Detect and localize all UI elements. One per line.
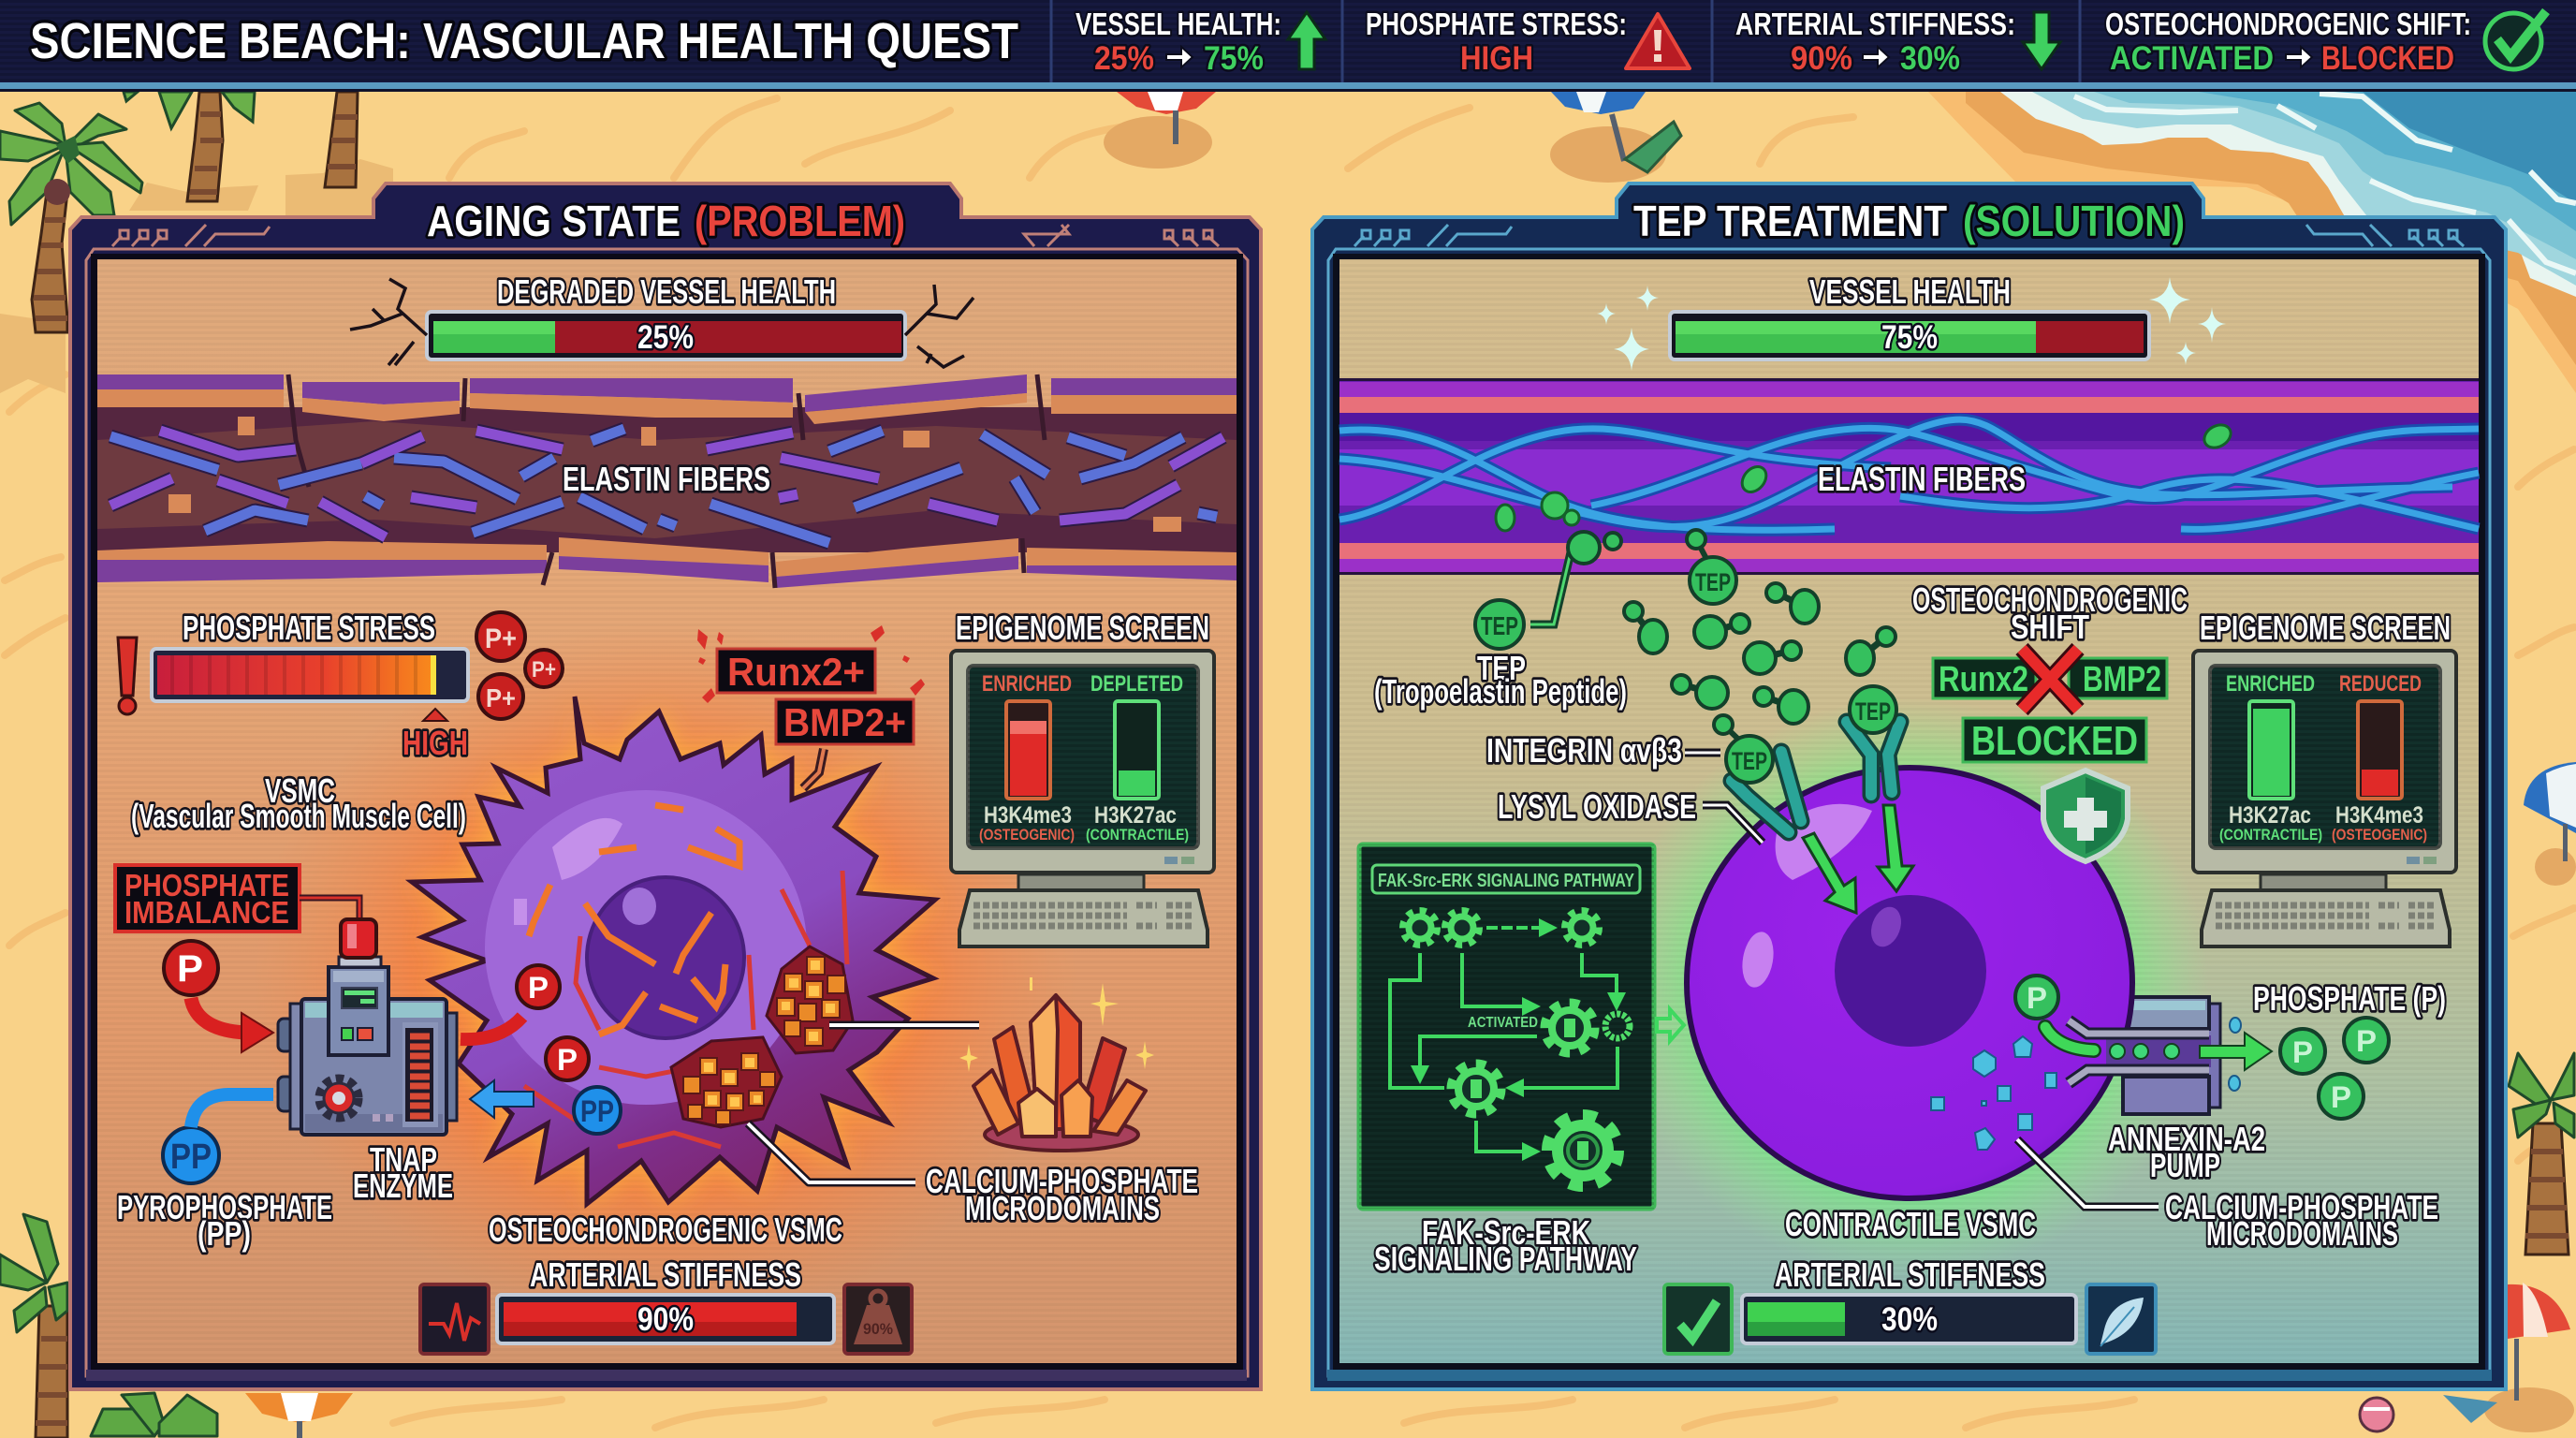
header bar	[0, 0, 2576, 92]
label: tep: (Tropoelastin Peptide)	[1374, 672, 1627, 711]
label: osteochondrogenic shift	[1912, 580, 2188, 646]
pump: annexin-a2	[2123, 997, 2220, 1114]
callout line: microdomains	[2017, 1139, 2159, 1207]
icon: cracks beside bar	[350, 279, 973, 367]
stat: arterial stiffness: ARTERIAL STIFFNESS:	[1735, 7, 2015, 41]
panel frame	[70, 183, 1261, 1389]
parasol: right blue	[2524, 762, 2576, 886]
panel heading: AGING STATE	[427, 197, 681, 245]
label: annexin-a2 pump: PUMP	[2150, 1146, 2220, 1184]
tags: runx2 bmp2 blocked: BMP2	[2083, 660, 2161, 699]
molecule: pyrophosphate: PP	[170, 1137, 212, 1177]
tube: h3k4me3	[2358, 701, 2402, 799]
label: tep	[1374, 649, 1627, 711]
label: contractile vsmc: CONTRACTILE VSMC	[1785, 1205, 2036, 1243]
label: elastin fibers: ELASTIN FIBERS	[563, 460, 770, 498]
gears	[1403, 911, 1630, 1186]
tags: runx2 bmp2 blocked: BLOCKED	[1971, 718, 2138, 764]
computer: epigenome screen: ENRICHED	[2226, 671, 2315, 697]
molecules: tropoelastin peptides	[1624, 583, 1895, 724]
palm: right	[2509, 1053, 2574, 1255]
label: lysyl oxidase: LYSYL OXIDASE	[1498, 787, 1696, 826]
tags: runx2 bmp2 blocked: Runx2	[1939, 660, 2028, 699]
tag: bmp2+: BMP2+	[783, 700, 906, 744]
sparks	[697, 625, 925, 703]
label callouts: calcium-phosphate lines	[748, 1025, 979, 1182]
molecule: tep free: TEP	[1695, 568, 1731, 596]
arrow and molecule: pp	[470, 1080, 621, 1134]
label: calcium-phosphate microdomains: MICRODOMAINS	[2206, 1214, 2398, 1253]
label: vsmc: VSMC	[265, 771, 335, 810]
label: arterial stiffness: ARTERIAL STIFFNESS	[1775, 1255, 2045, 1294]
panel heading	[1633, 197, 2185, 245]
stat: arterial stiffness	[1735, 7, 2060, 77]
phosphate particles	[476, 612, 563, 719]
pathway arrows	[1390, 928, 1617, 1152]
parasols, palms: bottom and right edge	[0, 762, 2576, 1438]
computer: epigenome screen	[2193, 651, 2456, 946]
panel: fak-src-erk pathway	[1359, 844, 1654, 1209]
tube: h3k27ac	[2249, 701, 2293, 799]
molecules: phosphate p: P	[2331, 1080, 2351, 1114]
phosphate particles: P+	[532, 657, 556, 682]
stat: vessel health: 75%	[1204, 40, 1264, 77]
stat: arterial stiffness: 30%	[1900, 40, 1960, 77]
label: calcium-phosphate microdomains: MICRODOMAINS	[965, 1189, 1160, 1227]
pathway title	[1372, 865, 1640, 893]
receptors: integrin with bound tep: TEP	[1732, 747, 1767, 775]
arrow: phosphate out: P	[528, 971, 549, 1005]
label: lysyl oxidase	[1498, 787, 1763, 843]
artery: damaged vessel wall	[97, 374, 1237, 588]
arrows: signal into nucleus	[1803, 805, 1913, 913]
label: arterial stiffness: ARTERIAL STIFFNESS	[530, 1255, 801, 1294]
nucleus	[587, 877, 744, 1038]
label: tep: TEP	[1477, 649, 1526, 687]
label: vessel health: VESSEL HEALTH	[1809, 272, 2011, 311]
molecule: tep with callout	[1475, 532, 1621, 649]
crystal: calcium-phosphate	[973, 995, 1146, 1151]
tube: h3k4me3	[1006, 701, 1050, 799]
artery: healthy vessel wall	[1339, 378, 2479, 575]
parasol: bottom	[245, 1393, 353, 1438]
palm 1	[0, 103, 142, 332]
nucleus	[1835, 895, 1986, 1047]
palm: bottom left	[0, 1214, 67, 1438]
bar: arterial stiffness 90%	[497, 1295, 834, 1343]
receptors: integrin with bound tep	[1714, 686, 1900, 832]
ocean: top right shoreline	[1928, 92, 2576, 393]
computer: epigenome screen: H3K27ac	[1094, 802, 1177, 829]
phosphate particles: P+	[486, 683, 516, 712]
label: fak-src-erk: FAK-Src-ERK	[1422, 1213, 1590, 1252]
panel heading: (SOLUTION)	[1963, 197, 2185, 245]
icon: heartbeat	[420, 1284, 489, 1354]
microdomain clusters	[671, 946, 853, 1127]
molecules: phosphate p: P	[2027, 981, 2047, 1015]
tube: h3k27ac	[1115, 701, 1159, 799]
arrow and molecule: pp: PP	[580, 1094, 614, 1128]
tag: runx2+: Runx2+	[727, 650, 865, 694]
icon: shield	[2043, 770, 2128, 861]
label: pyrophosphate: PYROPHOSPHATE	[117, 1188, 332, 1226]
panel heading: (PROBLEM)	[695, 197, 905, 245]
bar: vessel health 25%: 25%	[637, 319, 694, 356]
bar: arterial stiffness 30%: 30%	[1881, 1301, 1938, 1338]
stat: vessel health: 25%	[1094, 40, 1154, 77]
label: calcium-phosphate microdomains	[2165, 1188, 2438, 1253]
palm: bottom crown	[91, 1393, 217, 1436]
stat: vessel health	[1076, 7, 1325, 77]
bar: vessel health 25%	[427, 312, 905, 360]
cracks	[529, 805, 739, 1034]
beach ball	[2360, 1398, 2393, 1431]
label: calcium-phosphate microdomains: CALCIUM-PHOSPHATE	[926, 1162, 1198, 1200]
molecule: pyrophosphate	[163, 1094, 273, 1183]
stat: phosphate stress: PHOSPHATE STRESS:	[1366, 7, 1627, 41]
panel heading: TEP TREATMENT	[1633, 197, 1947, 245]
stat: osteochondrogenic shift: ACTIVATED	[2110, 40, 2274, 77]
label: vsmc: (Vascular Smooth Muscle Cell)	[131, 797, 466, 835]
marker: high: HIGH	[402, 724, 468, 762]
icon: feather	[2086, 1284, 2156, 1354]
tags: runx2 bmp2 blocked	[1933, 649, 2167, 764]
molecule: phosphate in cell: P	[557, 1043, 578, 1077]
bar: vessel health 75%	[1670, 312, 2149, 360]
computer: epigenome screen: ENRICHED	[982, 671, 1072, 697]
panel heading	[427, 197, 905, 245]
label: integrin: INTEGRIN αvβ3	[1486, 731, 1682, 770]
panel frame	[1312, 183, 2506, 1389]
stat: vessel health: VESSEL HEALTH:	[1076, 7, 1281, 41]
callout: phosphate imbalance: PHOSPHATE	[124, 868, 289, 902]
molecule: tep with callout: TEP	[1481, 611, 1518, 640]
icon: weight	[844, 1284, 912, 1354]
marker: high	[402, 709, 468, 762]
computer: epigenome screen: (CONTRACTILE)	[1086, 826, 1189, 844]
molecules: phosphate p: P	[2292, 1035, 2313, 1069]
computer: epigenome screen: (OSTEOGENIC)	[979, 826, 1075, 844]
elastin fibers	[1339, 419, 2479, 530]
label: elastin fibers: ELASTIN FIBERS	[1818, 460, 2026, 498]
label: fak-src-erk	[1374, 1213, 1637, 1278]
stat: osteochondrogenic shift	[2105, 7, 2546, 77]
arrow: phosphate out	[461, 965, 560, 1039]
computer: epigenome screen: (CONTRACTILE)	[2219, 826, 2322, 844]
icon: sparkles	[1597, 277, 2226, 371]
computer: epigenome screen: H3K4me3	[984, 802, 1072, 829]
icon: check	[1664, 1284, 1732, 1354]
label: degraded vessel health: DEGRADED VESSEL HEALTH	[497, 272, 836, 311]
label: annexin-a2 pump: ANNEXIN-A2	[2108, 1120, 2265, 1158]
stat: phosphate stress: HIGH	[1460, 40, 1533, 77]
molecule: phosphate in	[164, 941, 273, 1052]
label: osteochondrogenic shift: SHIFT	[2011, 608, 2089, 646]
computer: epigenome screen	[951, 651, 1214, 946]
cell: osteochondrogenic vsmc	[412, 697, 935, 1204]
palm trees: top left	[0, 92, 358, 332]
enzyme: tnap machine	[278, 919, 457, 1135]
label: tnap enzyme: TNAP	[370, 1140, 437, 1179]
gauge: phosphate stress high	[152, 649, 468, 701]
bar: arterial stiffness 90%: 90%	[637, 1301, 694, 1338]
label: calcium-phosphate microdomains: CALCIUM-PHOSPHATE	[2165, 1188, 2438, 1226]
icon: weight: 90%	[863, 1320, 893, 1338]
parasol: right red	[2484, 1283, 2574, 1432]
computer: epigenome screen: (OSTEOGENIC)	[2332, 826, 2427, 844]
arrow: pathway to cell	[1657, 1009, 1684, 1041]
pump channel and phosphate exit	[2045, 1018, 2272, 1091]
computer: epigenome screen: DEPLETED	[1090, 671, 1183, 697]
molecules: phosphate p: P	[2356, 1024, 2377, 1058]
label: annexin-a2 pump	[2108, 1120, 2265, 1184]
towel	[2443, 1395, 2497, 1423]
green glow	[1610, 697, 2209, 1278]
sparkles: crystal	[959, 977, 1154, 1072]
phosphate particles: P+	[485, 624, 517, 654]
label: pyrophosphate	[117, 1188, 332, 1253]
pathway title: FAK-Src-ERK SIGNALING PATHWAY	[1378, 871, 1635, 891]
palm 3	[325, 92, 358, 187]
elastin fragments	[110, 429, 1223, 543]
stat: osteochondrogenic shift: OSTEOCHONDROGENIC SHIFT:	[2105, 7, 2471, 41]
icon: exclamation	[118, 638, 137, 714]
receptors: integrin with bound tep: TEP	[1855, 697, 1891, 726]
molecule: tep free	[1687, 530, 1736, 604]
orange glow	[254, 623, 1077, 1325]
molecules: phosphate p	[2015, 976, 2389, 1119]
callout: phosphate imbalance: IMBALANCE	[124, 895, 289, 930]
label: fak-src-erk: SIGNALING PATHWAY	[1374, 1240, 1637, 1278]
computer: epigenome screen: REDUCED	[2339, 671, 2422, 697]
label: vsmc	[131, 771, 466, 835]
label: calcium-phosphate microdomains	[926, 1162, 1198, 1227]
bar: arterial stiffness 30%	[1742, 1295, 2076, 1343]
panel: aging state (problem)	[70, 183, 1261, 1389]
molecule: phosphate in cell	[546, 1037, 589, 1080]
label: phosphate stress: PHOSPHATE STRESS	[183, 609, 435, 647]
stat: osteochondrogenic shift: BLOCKED	[2321, 40, 2454, 77]
parasols: top of beach	[1104, 92, 1681, 183]
bar: vessel health 75%: 75%	[1881, 319, 1938, 356]
palm 2	[124, 92, 255, 201]
cell: contractile vsmc	[1687, 768, 2132, 1198]
label: phosphate (p): PHOSPHATE (P)	[2253, 979, 2446, 1018]
label: osteochondrogenic vsmc: OSTEOCHONDROGENIC VSMC	[489, 1211, 842, 1249]
label: tnap enzyme	[353, 1140, 453, 1205]
title: SCIENCE BEACH: VASCULAR HEALTH QUEST	[30, 13, 1018, 69]
computer: epigenome screen: H3K27ac	[2229, 802, 2311, 829]
stat: arterial stiffness: 90%	[1791, 40, 1852, 77]
label: activated: ACTIVATED	[1468, 1015, 1538, 1031]
floating peptides	[1496, 420, 2234, 531]
callout: phosphate imbalance	[115, 865, 359, 932]
computer: epigenome screen: H3K4me3	[2335, 802, 2423, 829]
label: pyrophosphate: (PP)	[198, 1214, 251, 1253]
crystals: dissolved microdomains	[1931, 1036, 2056, 1150]
label: epigenome screen: EPIGENOME SCREEN	[956, 609, 1209, 647]
panel: tep treatment (solution)	[1312, 183, 2506, 1389]
molecule: phosphate in: P	[177, 948, 203, 990]
label: osteochondrogenic shift: OSTEOCHONDROGENIC	[1912, 580, 2188, 619]
tag: bmp2+	[776, 699, 914, 788]
label: tnap enzyme: ENZYME	[353, 1167, 453, 1205]
label: epigenome screen: EPIGENOME SCREEN	[2200, 609, 2451, 647]
stat: phosphate stress	[1366, 7, 1690, 77]
